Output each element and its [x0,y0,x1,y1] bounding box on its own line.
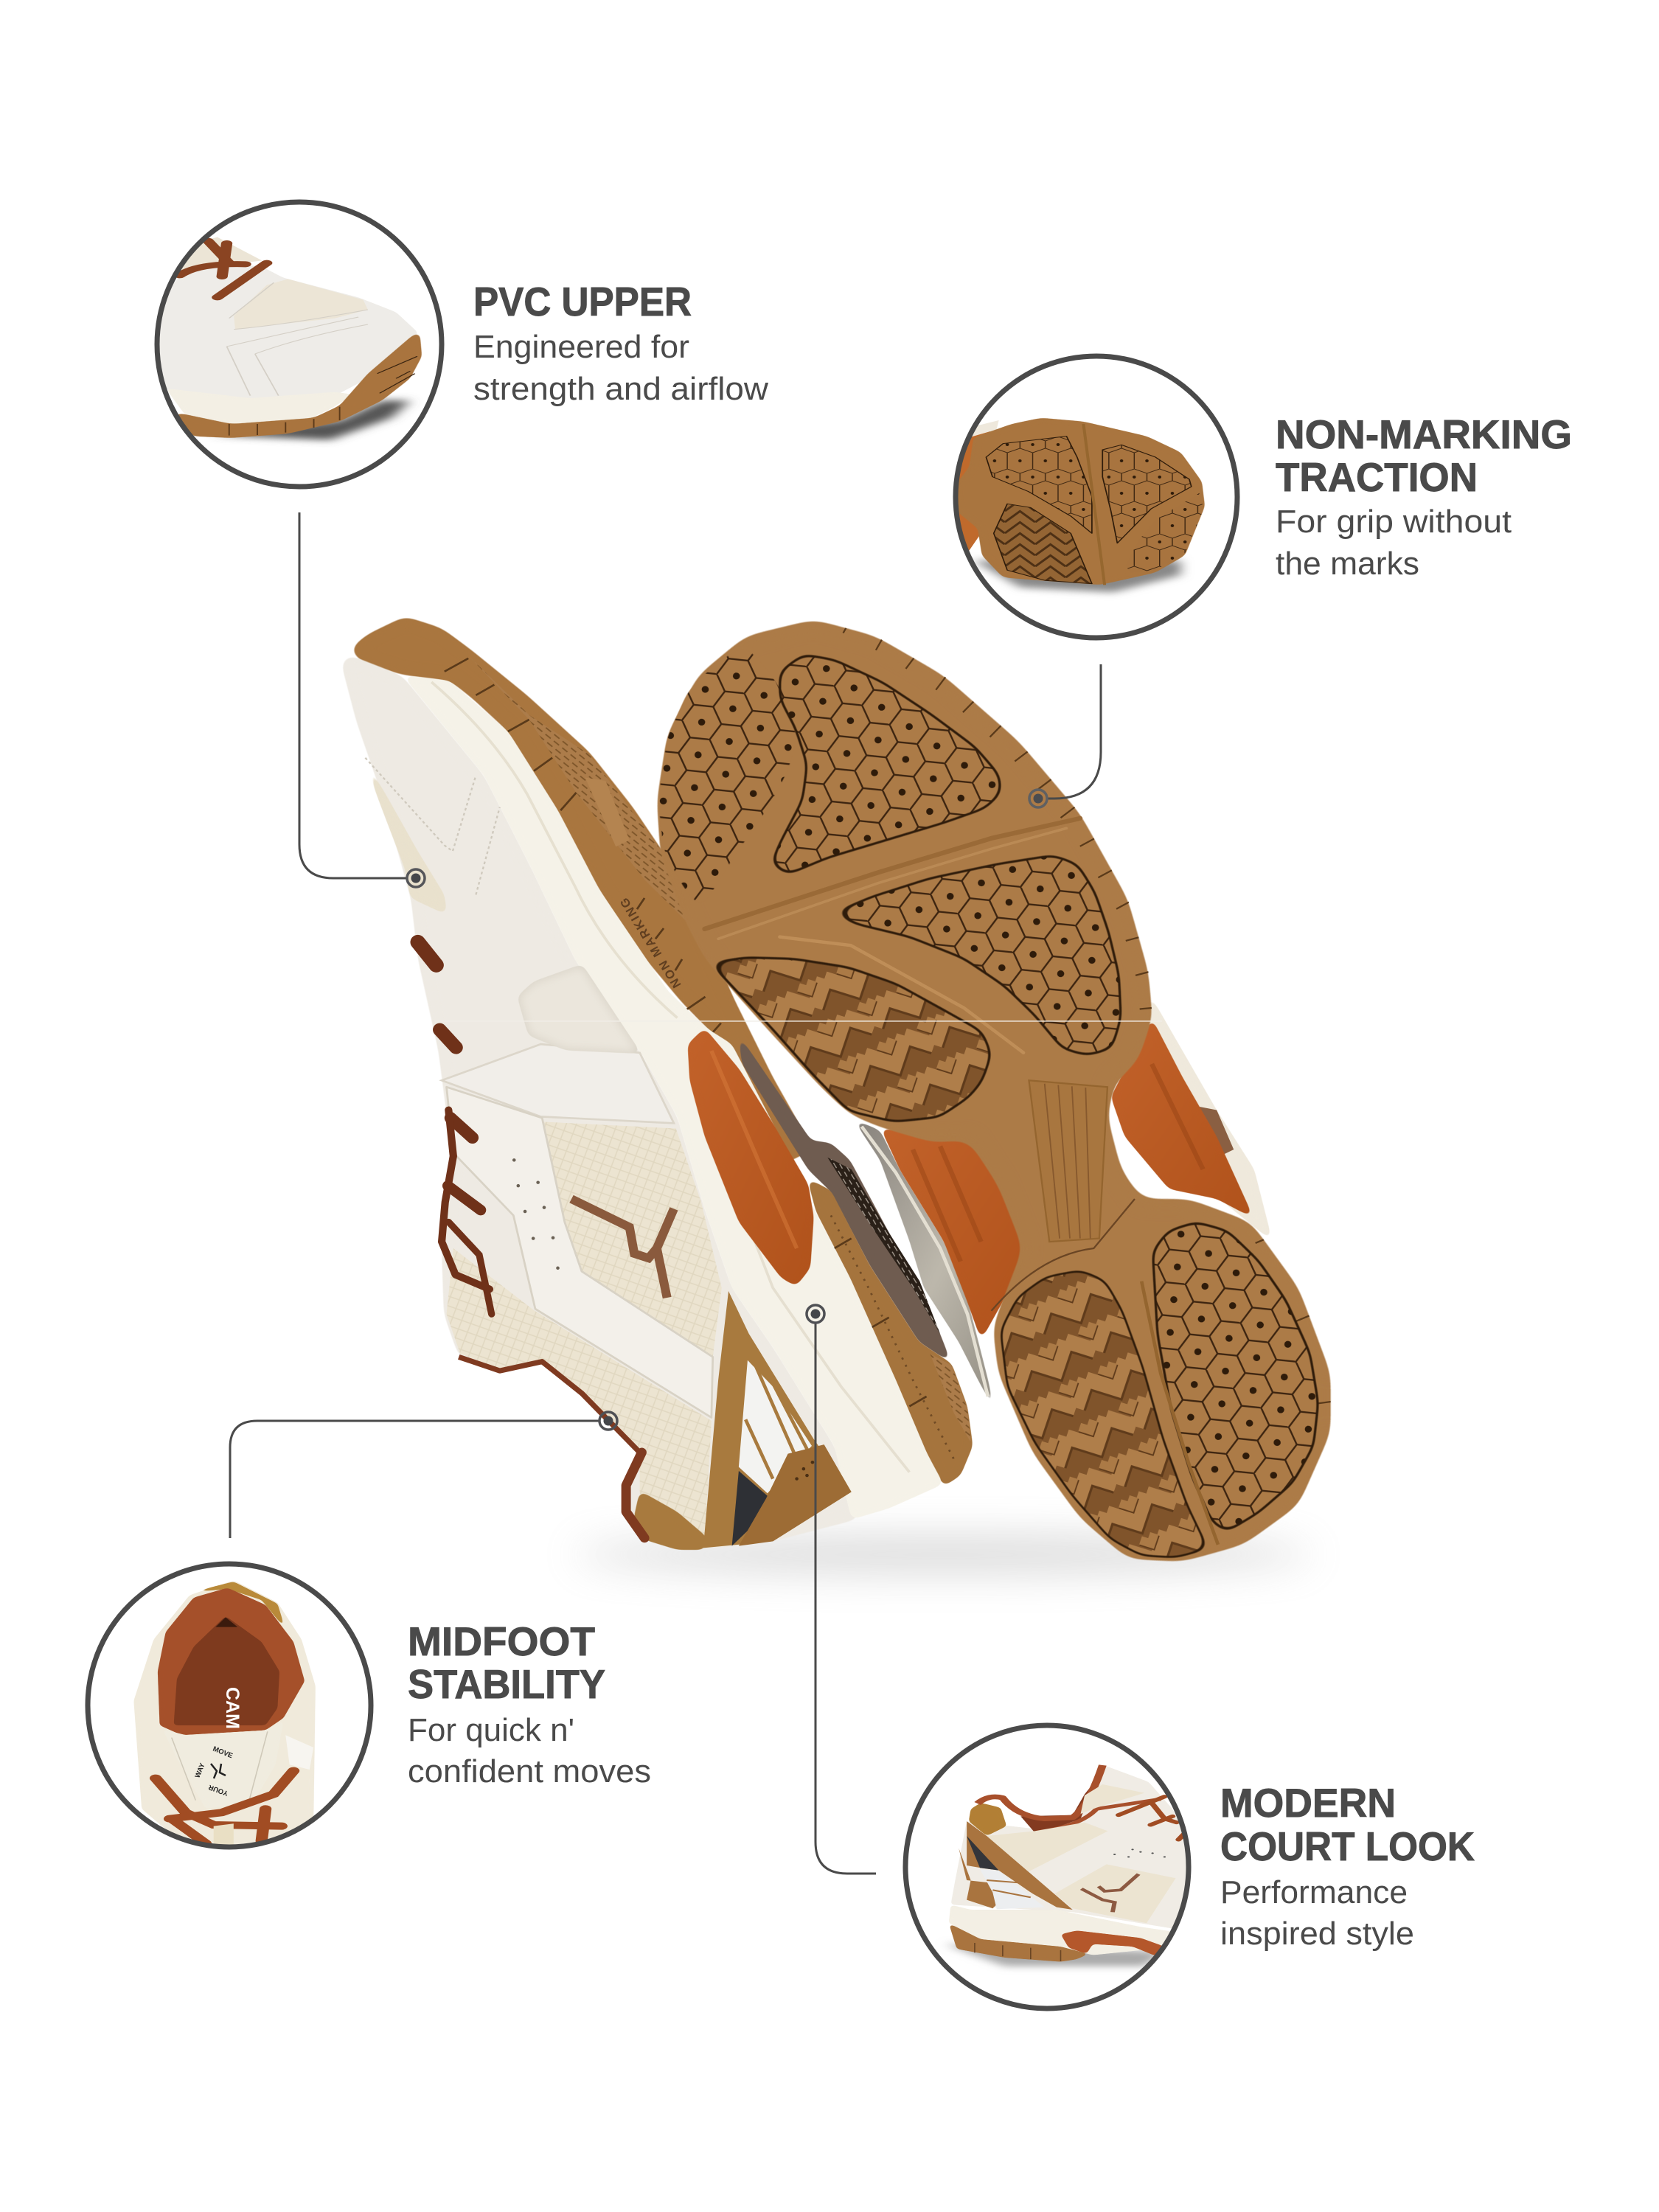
product photo: pair of court shoes [341,616,1331,1571]
ball hexagon tread [841,855,1122,1056]
heel hexagon tread [1149,1215,1326,1538]
tongue label text: WAY [194,1761,207,1779]
description: court look: inspired style [1220,1916,1414,1952]
left shoe side shaded outsole [737,1032,952,1363]
description: midfoot: For quick n' [408,1712,574,1748]
description: traction: For grip without [1276,504,1512,540]
heel collar rim [459,1357,640,1453]
heading: MODERN COURT LOOK: COURT LOOK [1220,1823,1475,1869]
midfoot herringbone tread [715,956,991,1122]
toe hexagon tread [659,653,795,901]
insole brand text: CAM [222,1687,243,1729]
callout: PVC upper [152,202,768,887]
side overlay panel [442,1044,674,1123]
description: court look [1220,1874,1414,1952]
connector line: court look [807,1305,876,1874]
sole grooves and arch ribs [705,818,1218,1545]
heading: MIDFOOT STABILITY: MIDFOOT [408,1618,595,1664]
description: court look: Performance [1220,1874,1408,1910]
laces [418,942,492,1314]
eyestay overlay strip [447,1087,713,1418]
tread edge ribs [848,623,1331,1439]
heading: MODERN COURT LOOK: MODERN [1220,1780,1396,1826]
outsole moulded text: NON MARKING [616,894,684,990]
orange midsole wedge [687,1028,814,1287]
heading: MODERN COURT LOOK [1220,1780,1475,1869]
tongue label text: MOVE [212,1745,234,1760]
description: PVC upper [473,329,768,407]
left shoe upper [341,655,862,1549]
midfoot mesh panel [544,1122,722,1357]
callout: midfoot stability [88,1412,651,1853]
description: midfoot: confident moves [408,1753,651,1790]
right shoe outsole [636,619,1331,1565]
tongue label text: YOUR [207,1783,229,1798]
white stripes [739,1360,812,1493]
heading: NON-MARKING TRACTION: TRACTION [1276,454,1478,500]
heading: NON-MARKING TRACTION [1276,411,1572,500]
ground shadow [575,1537,1312,1571]
right shoe upper behind sole [853,992,1273,1419]
heading: MIDFOOT STABILITY [408,1618,605,1707]
rear mesh panel [447,1248,712,1545]
inset vent panel [518,965,640,1053]
description: traction [1276,504,1512,582]
description: PVC upper: Engineered for [473,329,689,365]
connector line: PVC upper [299,512,425,887]
circle photo: shoe collar from above [88,1564,371,1853]
toe mesh [365,758,447,915]
callout: non-marking traction [952,356,1572,807]
outsole rib marks [445,658,721,1037]
description: traction: the marks [1276,546,1419,582]
heading: MIDFOOT STABILITY: STABILITY [408,1661,605,1707]
heel herringbone tread [1000,1270,1205,1559]
heading: NON-MARKING TRACTION: NON-MARKING [1276,411,1572,457]
heel tab [739,1444,852,1546]
circle photo: side of shoe [905,1725,1200,2008]
dark stripe [732,1471,774,1546]
heel counter tan panel [703,1291,852,1548]
forefoot hexagon tread [773,655,1001,873]
left shoe lower outsole [807,1178,973,1486]
description: midfoot [408,1712,651,1790]
right shoe orange shank panels [880,1018,1254,1340]
left shoe [341,655,973,1550]
description: PVC upper: strength and airflow [473,371,768,407]
photo seam hairline [435,1020,1162,1022]
connector line: traction [1029,664,1101,807]
circle photo: toe close-up [152,202,442,487]
connector line: midfoot [230,1412,617,1538]
left shoe toe outsole [348,616,814,1169]
callout: modern court look [807,1305,1475,2008]
midsole [402,675,944,1520]
heading: PVC UPPER: PVC UPPER [473,279,692,324]
circle photo: outsole close-up [952,356,1237,638]
tongue label text [194,1745,234,1798]
logo on mesh [571,1199,674,1298]
